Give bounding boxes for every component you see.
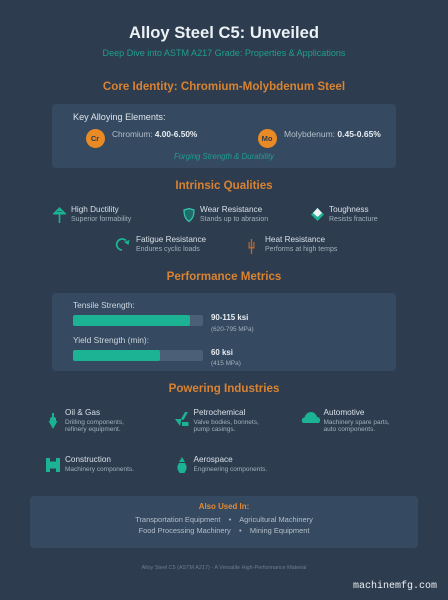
text: toughness (329, 205, 378, 223)
text: heat resistance (265, 235, 338, 253)
industry: aerospace (178, 455, 267, 473)
icon: Mo badge (258, 129, 276, 148)
label: yield strength: Yield Strength (min): (73, 335, 149, 345)
text: fatigue resistance: Endures cyclic loads (136, 246, 200, 253)
bar: yield strength (73, 350, 203, 361)
text: automotive: Machinery spare parts, (324, 419, 390, 426)
text: construction: Machinery components. (65, 466, 134, 473)
molybdenum value: Molybdenum: 0.45-0.65% (284, 128, 381, 138)
value: tensile strength: (620-795 MPa) (211, 326, 254, 332)
value: yield strength (211, 348, 241, 367)
text: high ductility (71, 205, 132, 223)
subtitle: Deep Dive into ASTM A217 Grade: Properties & Applications (103, 48, 345, 58)
icon: rocket (178, 457, 186, 473)
heading: intrinsic qualities: Intrinsic Qualities (175, 179, 273, 192)
heading: performance metrics: Performance Metrics (167, 270, 281, 283)
text: construction (65, 455, 134, 473)
text: petrochemical: pump casings. (194, 426, 235, 433)
text: oil and gas: Oil & Gas (65, 408, 100, 417)
chromium value: Chromium: 4.00-6.50% (112, 128, 197, 138)
icon: drill (48, 413, 58, 429)
value: tensile strength: 90-115 ksi (211, 313, 248, 322)
footer: Alloy Steel C5 (ASTM A217) - A Versatile High-Performance Material (141, 565, 306, 571)
panel: core identity (52, 104, 396, 168)
text: petrochemical: Petrochemical (194, 408, 245, 417)
text: heat resistance: Heat Resistance (265, 235, 325, 244)
watermark: machinemfg.com (353, 581, 437, 592)
icon: Cr badge (86, 129, 104, 148)
text: wear resistance (200, 205, 268, 223)
list row 1: Transportation Equipment • Agricultural Machinery (135, 515, 313, 524)
text: oil and gas: Drilling components, (65, 419, 124, 426)
text: automotive: auto components. (324, 426, 375, 433)
text: high ductility: Superior formability (71, 216, 131, 223)
quality: wear resistance (183, 205, 268, 223)
icon: heat (248, 239, 254, 254)
text: automotive (324, 408, 390, 433)
text: toughness: Resists fracture (329, 216, 378, 223)
text: heat resistance: Performs at high temps (265, 246, 337, 253)
quality: heat resistance (248, 235, 338, 254)
bar: tensile strength (73, 315, 203, 326)
tagline: Forging Strength & Durability (174, 152, 274, 161)
panel: also used in (30, 496, 418, 548)
list row 2: Food Processing Machinery • Mining Equipment (139, 526, 309, 535)
quality: fatigue resistance (116, 235, 206, 253)
quality: high ductility (53, 205, 132, 223)
heading: also used in: Also Used In: (199, 502, 249, 511)
icon: Mo badge: Mo (262, 134, 272, 143)
icon: cycle arrow (116, 238, 130, 251)
icon: cloud car (302, 412, 320, 423)
text: petrochemical (194, 408, 259, 433)
text: petrochemical: Valve bodies, bonnets, (194, 419, 259, 426)
text: toughness: Toughness (329, 205, 369, 214)
icon: toughness (311, 208, 324, 221)
text: aerospace (194, 455, 267, 473)
industry: petrochemical (175, 408, 259, 433)
icon: beam (46, 458, 60, 472)
key alloying label: Key Alloying Elements: (73, 112, 166, 122)
title: Alloy Steel C5: Unveiled (129, 23, 319, 42)
value: tensile strength (211, 313, 254, 332)
text: automotive: Automotive (324, 408, 364, 417)
text: fatigue resistance: Fatigue Resistance (136, 235, 206, 244)
text: high ductility: High Ductility (71, 205, 119, 214)
icon: ductility (53, 207, 66, 223)
icon: valve (175, 412, 188, 426)
value: yield strength: (415 MPa) (211, 360, 241, 367)
value: yield strength: 60 ksi (211, 348, 233, 357)
label: tensile strength: Tensile Strength: (73, 300, 135, 310)
quality: toughness (311, 205, 378, 223)
heading: powering industries: Powering Industries (169, 382, 279, 395)
text: wear resistance: Wear Resistance (200, 205, 262, 214)
text: aerospace: Aerospace (194, 455, 233, 464)
icon: Cr badge: Cr (91, 134, 99, 143)
text: fatigue resistance (136, 235, 206, 253)
panel: performance metrics (52, 293, 396, 371)
industry: oil and gas (48, 408, 124, 433)
text: construction: Construction (65, 455, 111, 464)
text: aerospace: Engineering components. (194, 466, 267, 473)
text: oil and gas (65, 408, 124, 433)
industry: construction (46, 455, 134, 473)
text: oil and gas: refinery equipment. (65, 426, 121, 433)
heading: core identity: Core Identity: Chromium-Molybdenum Steel (103, 80, 345, 93)
industry: automotive (302, 408, 390, 433)
icon: shield (183, 208, 195, 222)
text: wear resistance: Stands up to abrasion (200, 216, 268, 223)
